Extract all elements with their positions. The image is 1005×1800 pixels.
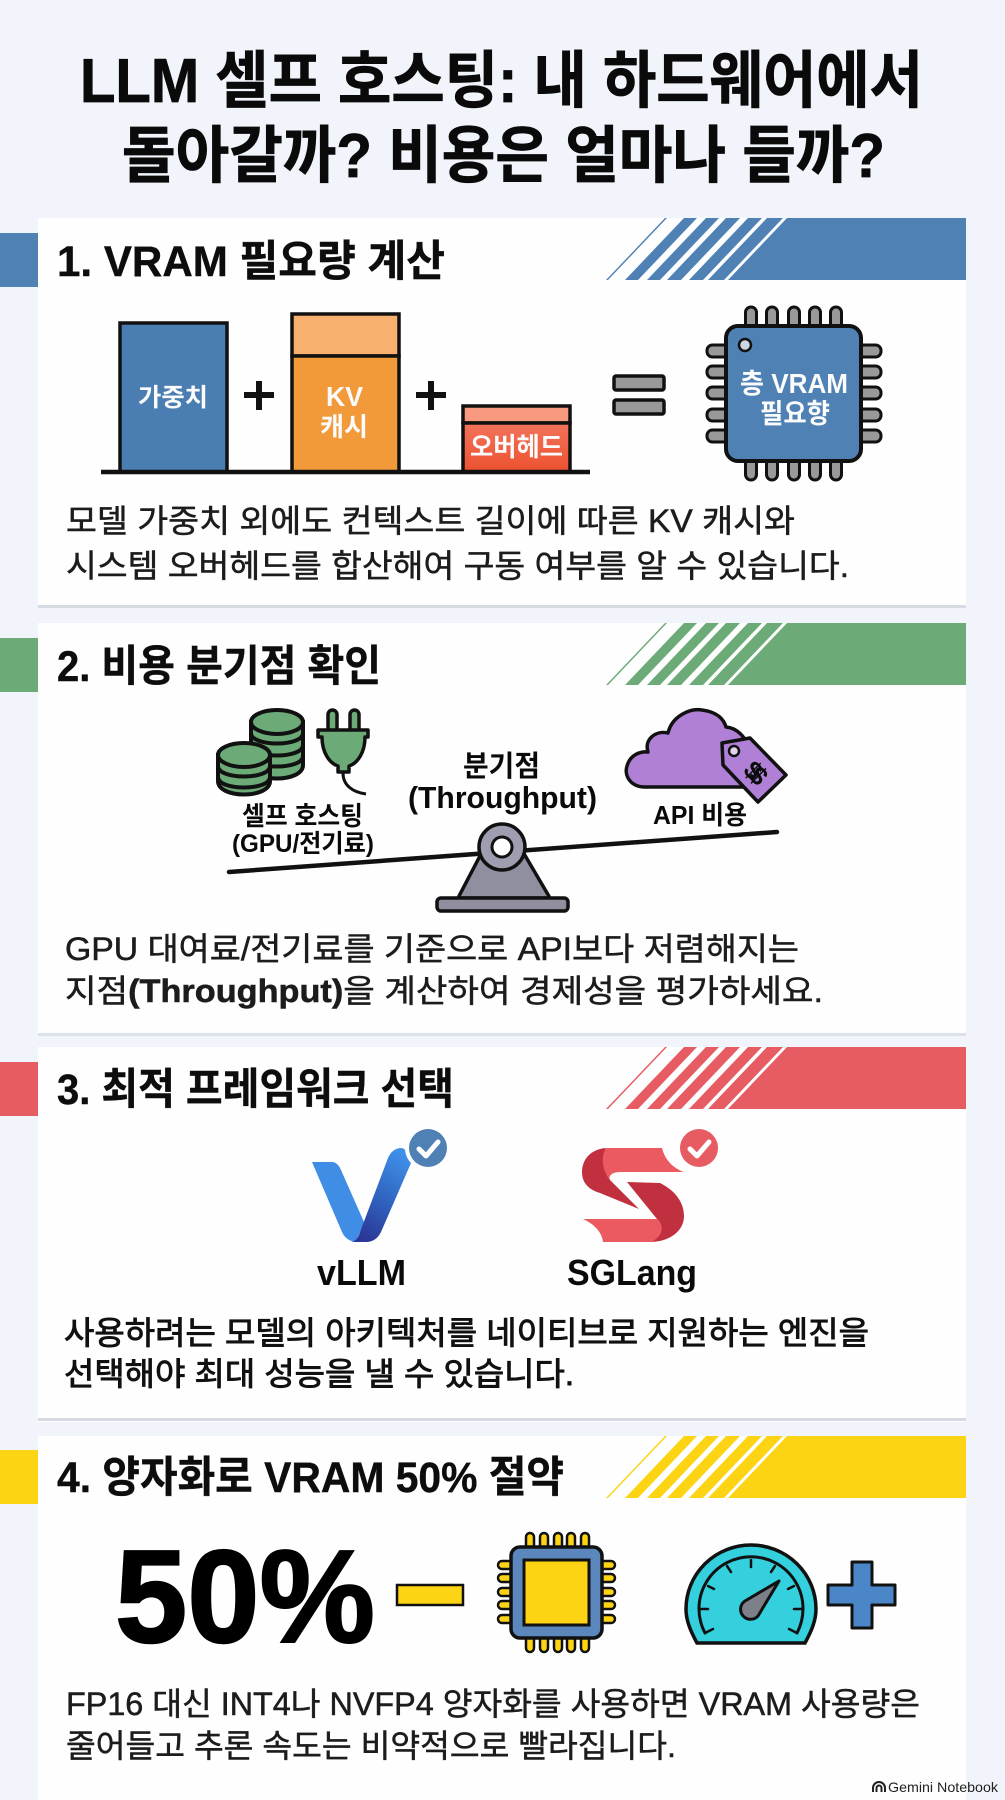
body text: section 3 xyxy=(64,1315,869,1392)
body text: section 3: 선택해야 최대 성능을 낼 수 있습니다. xyxy=(64,1356,574,1392)
panel: 1 VRAM requirement: 오버헤드 xyxy=(470,432,563,462)
panel: 2 cost break-even xyxy=(0,623,966,1036)
panel: 1 VRAM requirement: 가중치 xyxy=(138,384,208,412)
body text: section 2 xyxy=(65,931,823,1009)
body text: section 1: 시스템 오버헤드를 합산해여 구동 여부를 알 수 있습니다. xyxy=(66,548,849,584)
label: break-even xyxy=(408,750,597,815)
body text: section 1 xyxy=(66,503,849,584)
title xyxy=(80,47,923,191)
body text: section 4: 줄어들고 추론 속도는 비약적으로 빨라집니다. xyxy=(66,1728,676,1764)
label: break-even: (Throughput) xyxy=(408,780,597,815)
heading: section 1: 1. VRAM 필요량 계산 xyxy=(57,238,445,286)
panel: 3 framework choice xyxy=(0,1047,966,1422)
icon: seesaw balance xyxy=(229,824,777,911)
icon: cloud with price tag xyxy=(626,710,786,802)
bar diagram: weights + KV cache + overhead xyxy=(101,314,664,472)
label: self hosting: (GPU/전기료) xyxy=(232,830,374,858)
icon: VRAM chip xyxy=(707,307,881,480)
panel: 4 quantization xyxy=(0,1436,966,1800)
label: self hosting xyxy=(232,801,374,858)
title: 돌아갈까? 비용은 얼마나 들까? xyxy=(122,122,885,191)
panel: 1 VRAM requirement: 캐시 xyxy=(320,412,368,442)
icon: VRAM chip: 필요향 xyxy=(760,399,830,429)
label: break-even: 분기점 xyxy=(463,750,540,783)
heading: section 4: 4. 양자화로 VRAM 50% 절약 xyxy=(57,1454,564,1502)
label: API cost: API 비용 xyxy=(653,800,747,830)
heading: section 2: 2. 비용 분기점 확인 xyxy=(57,643,381,691)
label: SGLang: SGLang xyxy=(567,1252,697,1293)
label: self hosting: 셀프 호스팅 xyxy=(242,801,363,831)
icon: speed gauge xyxy=(686,1545,816,1643)
icon: minus xyxy=(397,1585,463,1605)
icon: VRAM chip: 층 VRAM xyxy=(740,368,848,399)
body text: section 3: 사용하려는 모델의 아키텍처를 네이티브로 지원하는 엔진을 xyxy=(64,1315,869,1351)
body text: section 4: FP16 대신 INT4나 NVFP4 양자화를 사용하면 VRAM 사용량은 xyxy=(66,1686,920,1722)
icon: cloud with price tag: $$ xyxy=(738,755,775,792)
icon: plus xyxy=(828,1562,895,1628)
watermark: Gemini Notebook: Gemini Notebook xyxy=(888,1779,999,1795)
icon: SGLang logo xyxy=(582,1129,718,1242)
big number: 50%: 50% xyxy=(115,1523,375,1670)
heading: section 3: 3. 최적 프레임워크 선택 xyxy=(57,1066,454,1114)
body text: section 2: 지점(Throughput) 을 계산하여 경제성을 평가하세요. xyxy=(65,973,823,1009)
panel: 1 VRAM requirement: KV xyxy=(326,381,363,412)
title: LLM 셀프 호스팅: 내 하드웨어에서 xyxy=(80,47,923,116)
panel: 1 VRAM requirement xyxy=(0,218,966,608)
icon: vLLM logo xyxy=(312,1129,447,1242)
body text: section 4 xyxy=(66,1686,920,1764)
icon: coin stacks xyxy=(218,710,303,794)
label: vLLM: vLLM xyxy=(317,1252,406,1293)
body text: section 2: GPU 대여료/전기료를 기준으로 API보다 저렴해지는 xyxy=(65,931,799,967)
body text: section 1: 모델 가중치 외에도 컨텍스트 길이에 따른 KV 캐시와 xyxy=(66,503,795,539)
icon: power plug xyxy=(318,710,368,794)
icon: quantized chip xyxy=(498,1533,615,1652)
